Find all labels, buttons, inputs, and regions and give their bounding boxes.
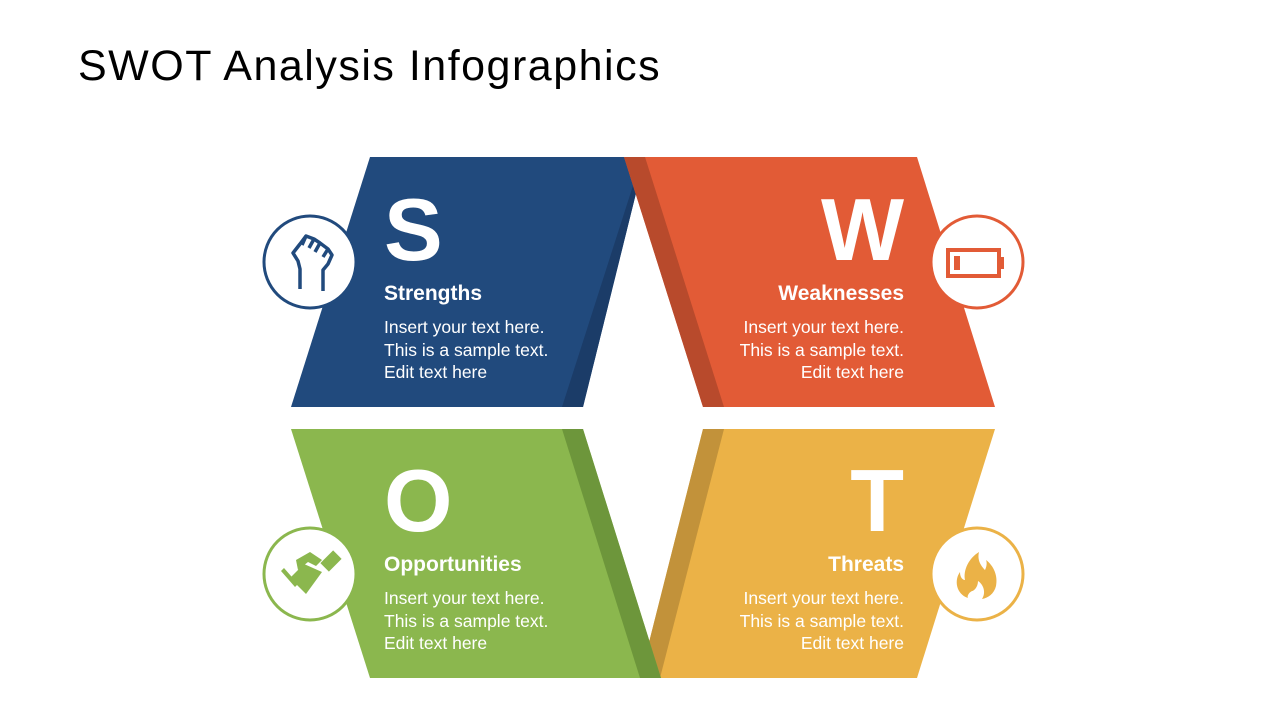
text: weaknesses	[740, 180, 904, 382]
panel: weaknesses	[624, 157, 995, 407]
text: strengths: Edit text here	[384, 362, 487, 382]
icon: battery	[931, 216, 1023, 308]
text: opportunities	[384, 451, 548, 653]
text: opportunities: Opportunities	[384, 553, 522, 576]
text: threats: T	[850, 451, 904, 550]
text: threats: This is a sample text.	[740, 610, 904, 630]
text: weaknesses: W	[821, 180, 904, 279]
text: strengths: Strengths	[384, 282, 482, 305]
icon: fist	[264, 216, 356, 308]
title: SWOT Analysis Infographics	[78, 42, 661, 90]
text: threats: Edit text here	[801, 633, 904, 653]
panel: strengths	[291, 157, 645, 407]
text: weaknesses: Insert your text here.	[744, 317, 904, 337]
text: threats	[740, 451, 904, 653]
text: strengths	[384, 180, 548, 382]
text: opportunities: O	[384, 451, 452, 550]
text: threats: Threats	[828, 553, 904, 576]
text: threats: Insert your text here.	[744, 588, 904, 608]
panel: threats	[640, 429, 995, 678]
text: strengths: S	[384, 180, 443, 279]
icon: handshake	[264, 528, 356, 620]
icon: flame	[931, 528, 1023, 620]
text: weaknesses: Weaknesses	[778, 282, 904, 305]
text: opportunities: Insert your text here.	[384, 588, 544, 608]
text: opportunities: This is a sample text.	[384, 610, 548, 630]
text: strengths: Insert your text here.	[384, 317, 544, 337]
text: weaknesses: This is a sample text.	[740, 340, 904, 360]
text: opportunities: Edit text here	[384, 633, 487, 653]
text: strengths: This is a sample text.	[384, 340, 548, 360]
text: weaknesses: Edit text here	[801, 362, 904, 382]
panel: opportunities	[291, 429, 661, 678]
